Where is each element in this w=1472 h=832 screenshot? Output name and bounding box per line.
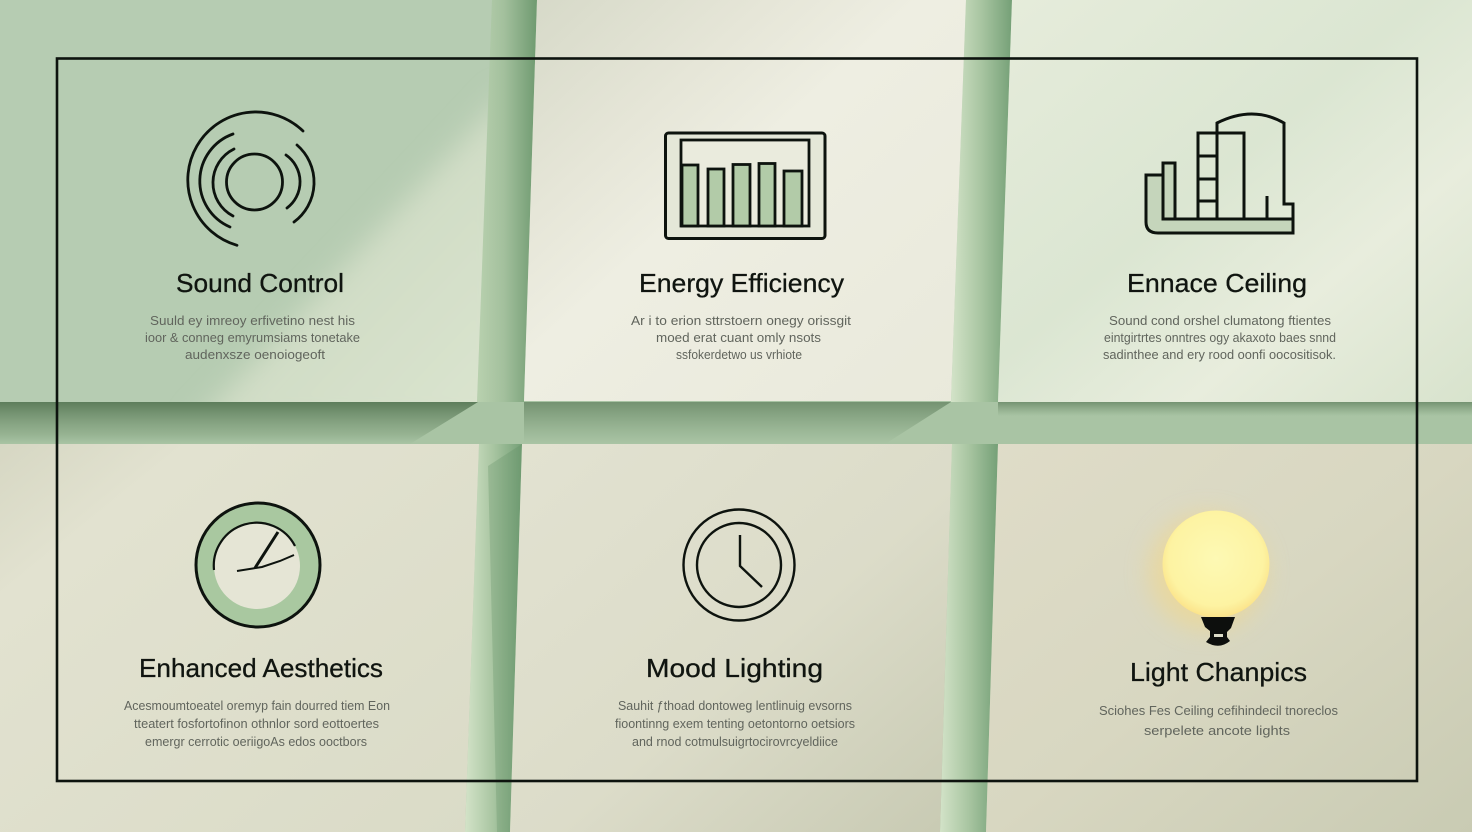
- heading: light graphics: Light Chanpics: [1130, 657, 1307, 687]
- text block: enhance ceiling description: sadinthee and ery rood oonfi oocositisok.: [1103, 348, 1336, 362]
- heading: enhance ceiling: Ennace Ceiling: [1127, 268, 1307, 298]
- text block: mood lighting description: [615, 699, 855, 749]
- text block: enhanced aesthetics description: [124, 699, 390, 749]
- panel: light graphics: [986, 444, 1472, 832]
- heading: mood lighting: Mood Lighting: [646, 653, 823, 683]
- text block: sound control description: Suuld ey imreoy erfivetino nest his: [150, 314, 355, 328]
- icon: concentric sound waves: [188, 112, 314, 245]
- text block: energy efficiency description: Ar i to erion sttrstoern onegy orissgit: [631, 314, 852, 328]
- panel: mood lighting: [510, 444, 952, 832]
- text block: enhanced aesthetics description: Acesmoumtoeatel oremyp fain dourred tiem Eon: [124, 699, 390, 713]
- text block: enhance ceiling description: Sound cond orshel clumatong ftientes: [1109, 314, 1331, 328]
- icon: bar chart in frame: [666, 133, 825, 238]
- heading: energy efficiency: Energy Efficiency: [639, 268, 844, 298]
- panel: sound control: [0, 0, 510, 430]
- text block: energy efficiency description: moed erat cuant omly nsots: [656, 331, 821, 345]
- text block: sound control description: audenxsze oenoiogeoft: [185, 348, 326, 362]
- text block: light graphics description: [1099, 704, 1338, 738]
- text block: light graphics description: Sciohes Fes Ceiling cefihindecil tnoreclos: [1099, 704, 1338, 718]
- panel: enhanced aesthetics: [0, 444, 479, 832]
- text block: enhance ceiling description: eintgirtrtes onntres ogy akaxoto baes snnd: [1104, 331, 1336, 345]
- icon: clock with green ring: [196, 503, 320, 627]
- heading: sound control: Sound Control: [176, 268, 344, 298]
- text block: sound control description: [145, 314, 360, 362]
- panel: enhance ceiling: [998, 0, 1472, 402]
- icon: glowing light bulb: [1149, 510, 1270, 646]
- icon: double ring clock: [684, 510, 794, 620]
- text block: enhance ceiling description: [1103, 314, 1336, 362]
- text block: mood lighting description: fioontinng exem tenting oetontorno oetsiors: [615, 717, 855, 731]
- text block: enhanced aesthetics description: tteatert fosfortofinon othnlor sord eottoertes: [134, 717, 379, 731]
- text block: sound control description: ioor & conneg emyrumsiams tonetake: [145, 331, 360, 345]
- panel: energy efficiency: [524, 0, 966, 401]
- text block: light graphics description: serpelete ancote lights: [1144, 724, 1290, 738]
- text block: mood lighting description: and rnod cotmulsuigrtocirovrcyeldiice: [632, 735, 838, 749]
- icon: building outline: [1146, 114, 1293, 233]
- text block: mood lighting description: Sauhit ƒthoad dontoweg lentlinuig evsorns: [618, 699, 852, 713]
- text block: energy efficiency description: [631, 314, 852, 362]
- text block: enhanced aesthetics description: emergr cerrotic oeriigoAs edos ooctbors: [145, 735, 367, 749]
- text block: energy efficiency description: ssfokerdetwo us vrhiote: [676, 348, 802, 362]
- heading: enhanced aesthetics: Enhanced Aesthetics: [139, 653, 383, 683]
